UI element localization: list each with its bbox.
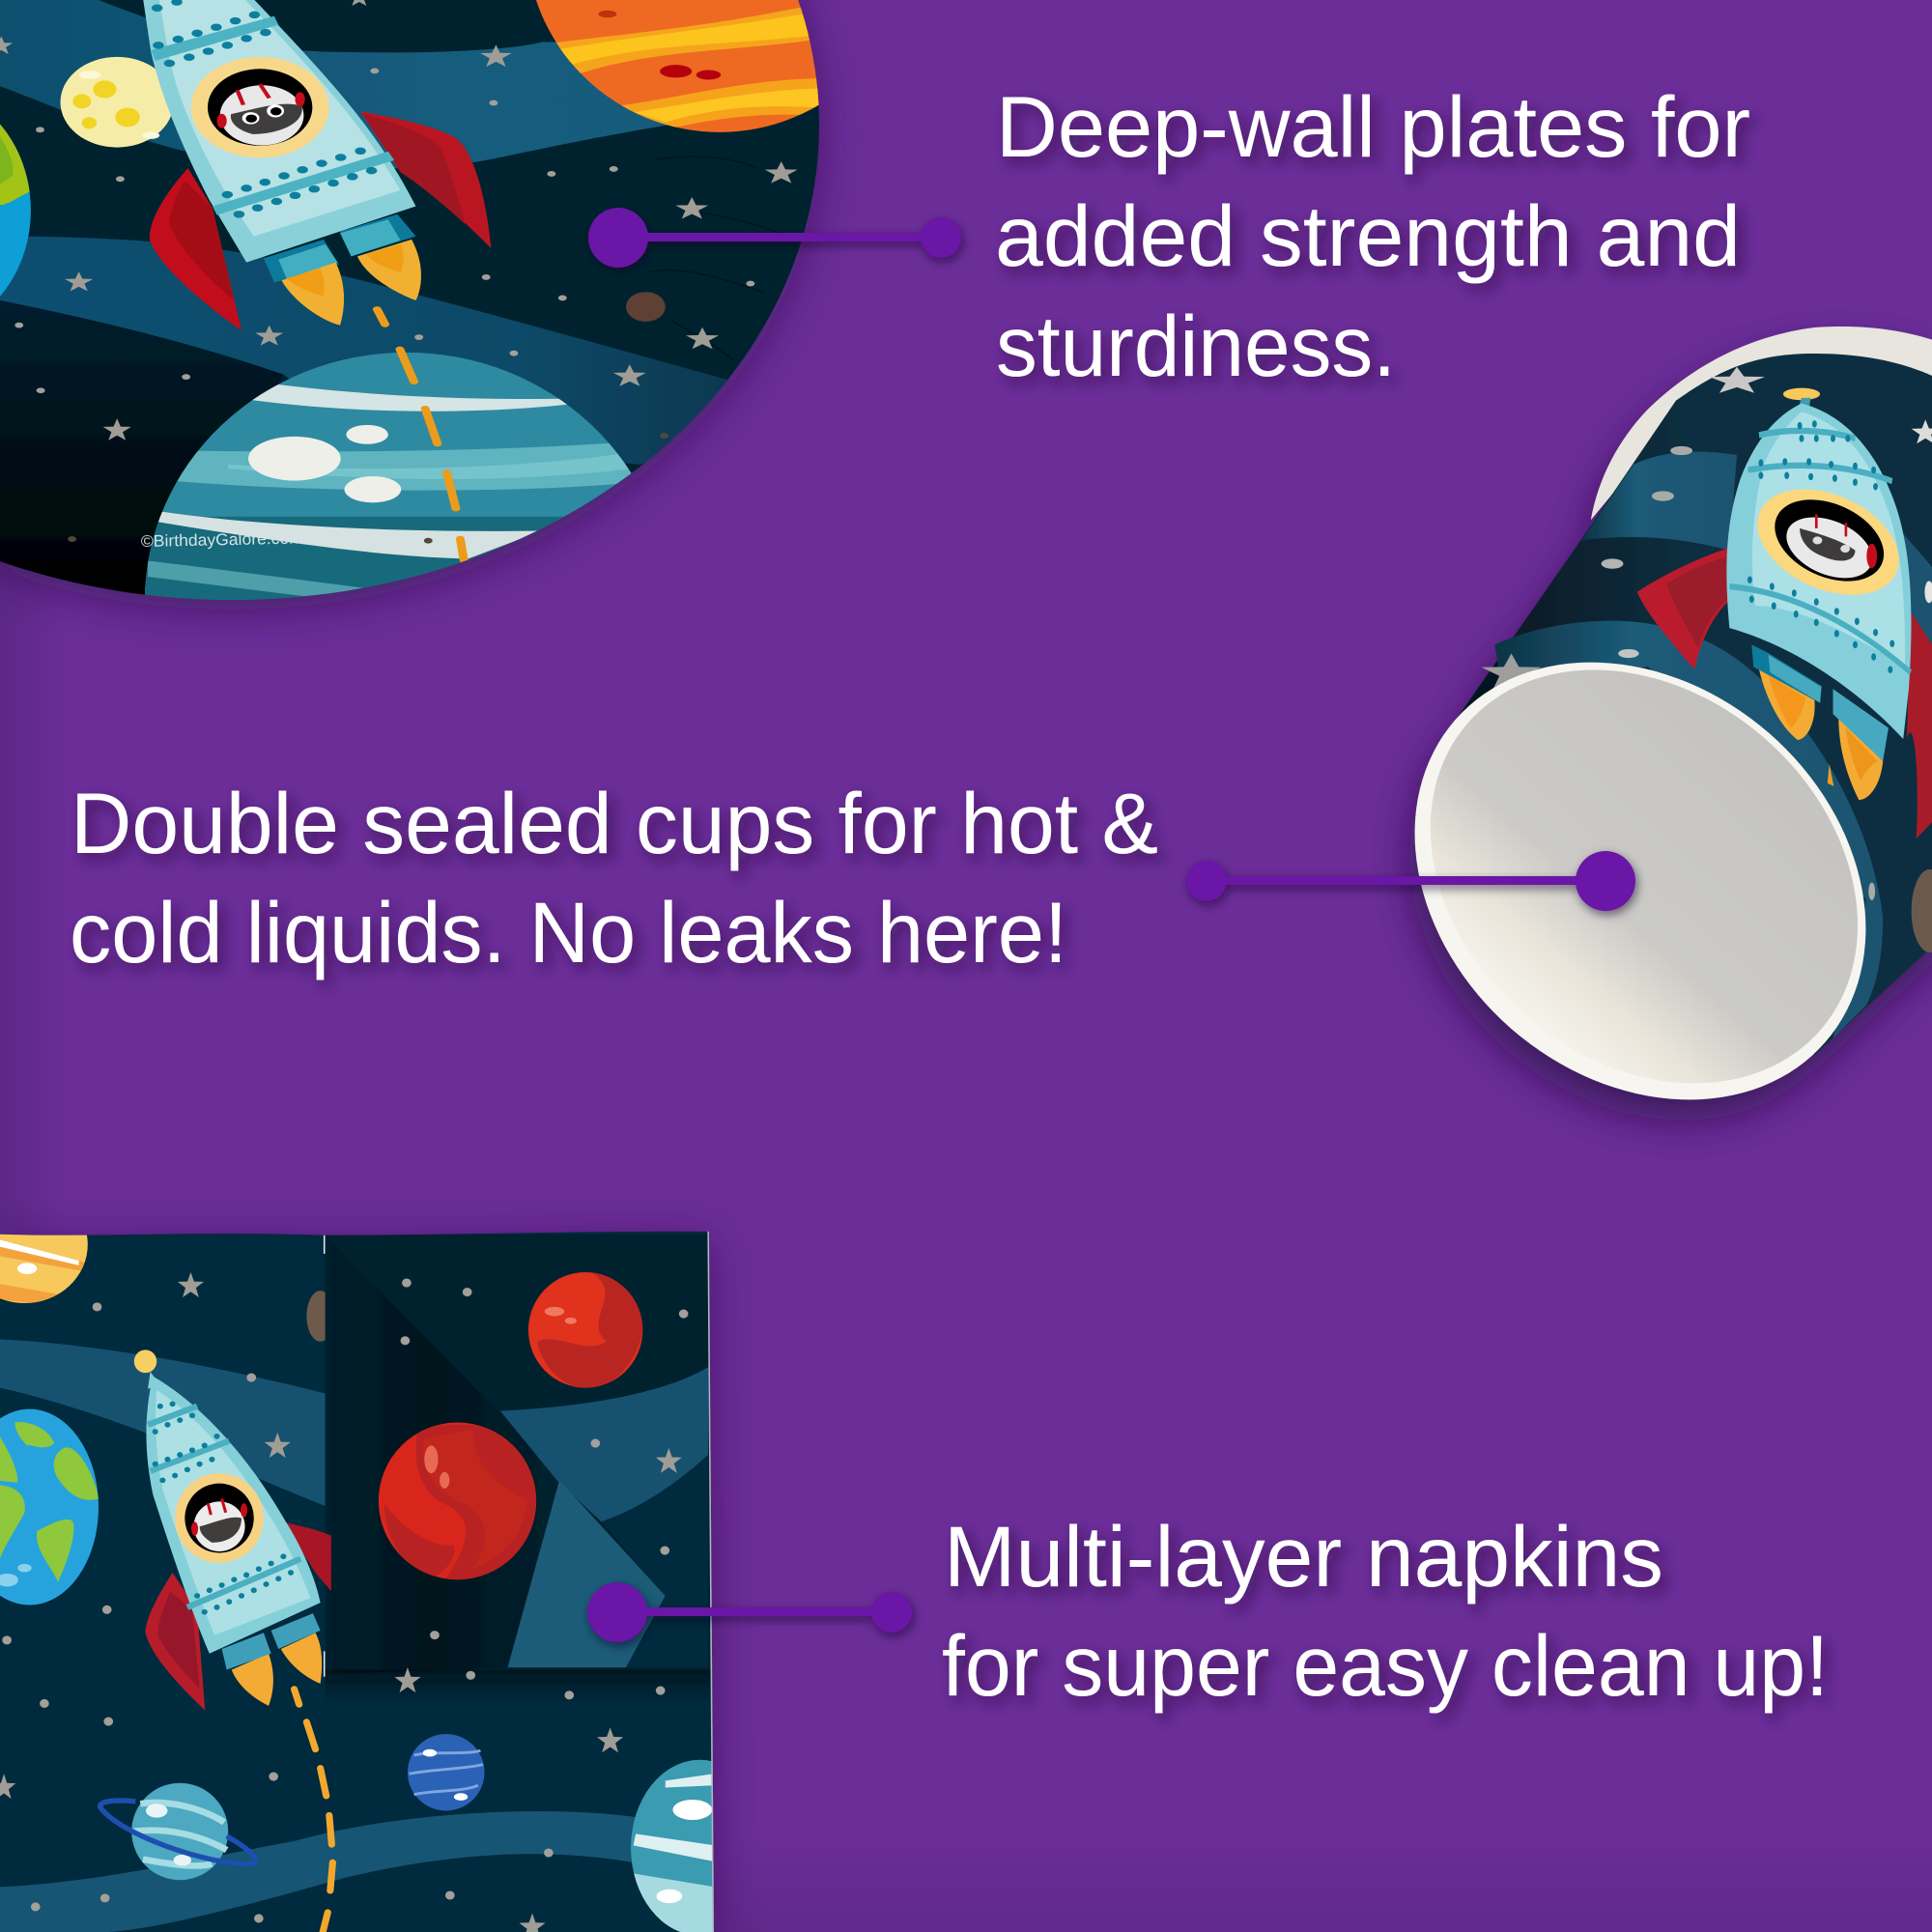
text: cups: Double sealed cups for hot &: [71, 775, 1158, 871]
planet: ringed: [100, 1783, 255, 1880]
copyright mark: ©BirthdayGalore.com: [141, 528, 303, 551]
bottom band: [0, 1811, 640, 1932]
napkin flight path dashes: [295, 1690, 332, 1932]
connector: cups: [1186, 851, 1635, 911]
cup base: [1326, 572, 1932, 1190]
planet: red large: [379, 1423, 542, 1582]
planet: small top left: [0, 1186, 89, 1304]
connector: plates: [588, 208, 961, 268]
napkin: [0, 1186, 769, 1932]
flight path dashes: [377, 309, 464, 560]
napkin rocket: [134, 1350, 331, 1711]
text: plates: added strength and: [995, 187, 1741, 284]
rocket: [143, 0, 491, 330]
planet: red small: [528, 1272, 643, 1390]
planet: earth: [0, 124, 31, 297]
planet: teal right: [631, 1760, 769, 1932]
cup: [1326, 327, 1932, 1190]
planet: blue: [408, 1734, 485, 1810]
connector: napkins: [587, 1582, 912, 1642]
text: plates: sturdiness.: [996, 298, 1396, 394]
plate: [0, 0, 837, 628]
planet: teal striped: [145, 352, 632, 600]
napkin folded panel: [325, 1235, 715, 1702]
napkin stars and dots: [0, 1272, 684, 1932]
text: cups: cold liquids. No leaks here!: [70, 884, 1067, 980]
text: napkins: Multi-layer napkins: [944, 1508, 1663, 1605]
cup rocket: [1637, 388, 1932, 838]
moon: [61, 57, 174, 148]
text: cups: [70, 775, 1158, 980]
text: plates: Deep-wall plates for: [996, 78, 1750, 175]
text: plates: [995, 78, 1750, 394]
cup rim: [1591, 327, 1932, 520]
cup body: [1452, 354, 1932, 1055]
planet: orange: [526, 0, 913, 132]
planet: earth: [0, 1409, 99, 1605]
napkin left panel: [0, 1291, 334, 1508]
text: napkins: [942, 1508, 1829, 1714]
stars and dots: [0, 0, 798, 541]
text: napkins: for super easy clean up!: [942, 1617, 1829, 1714]
